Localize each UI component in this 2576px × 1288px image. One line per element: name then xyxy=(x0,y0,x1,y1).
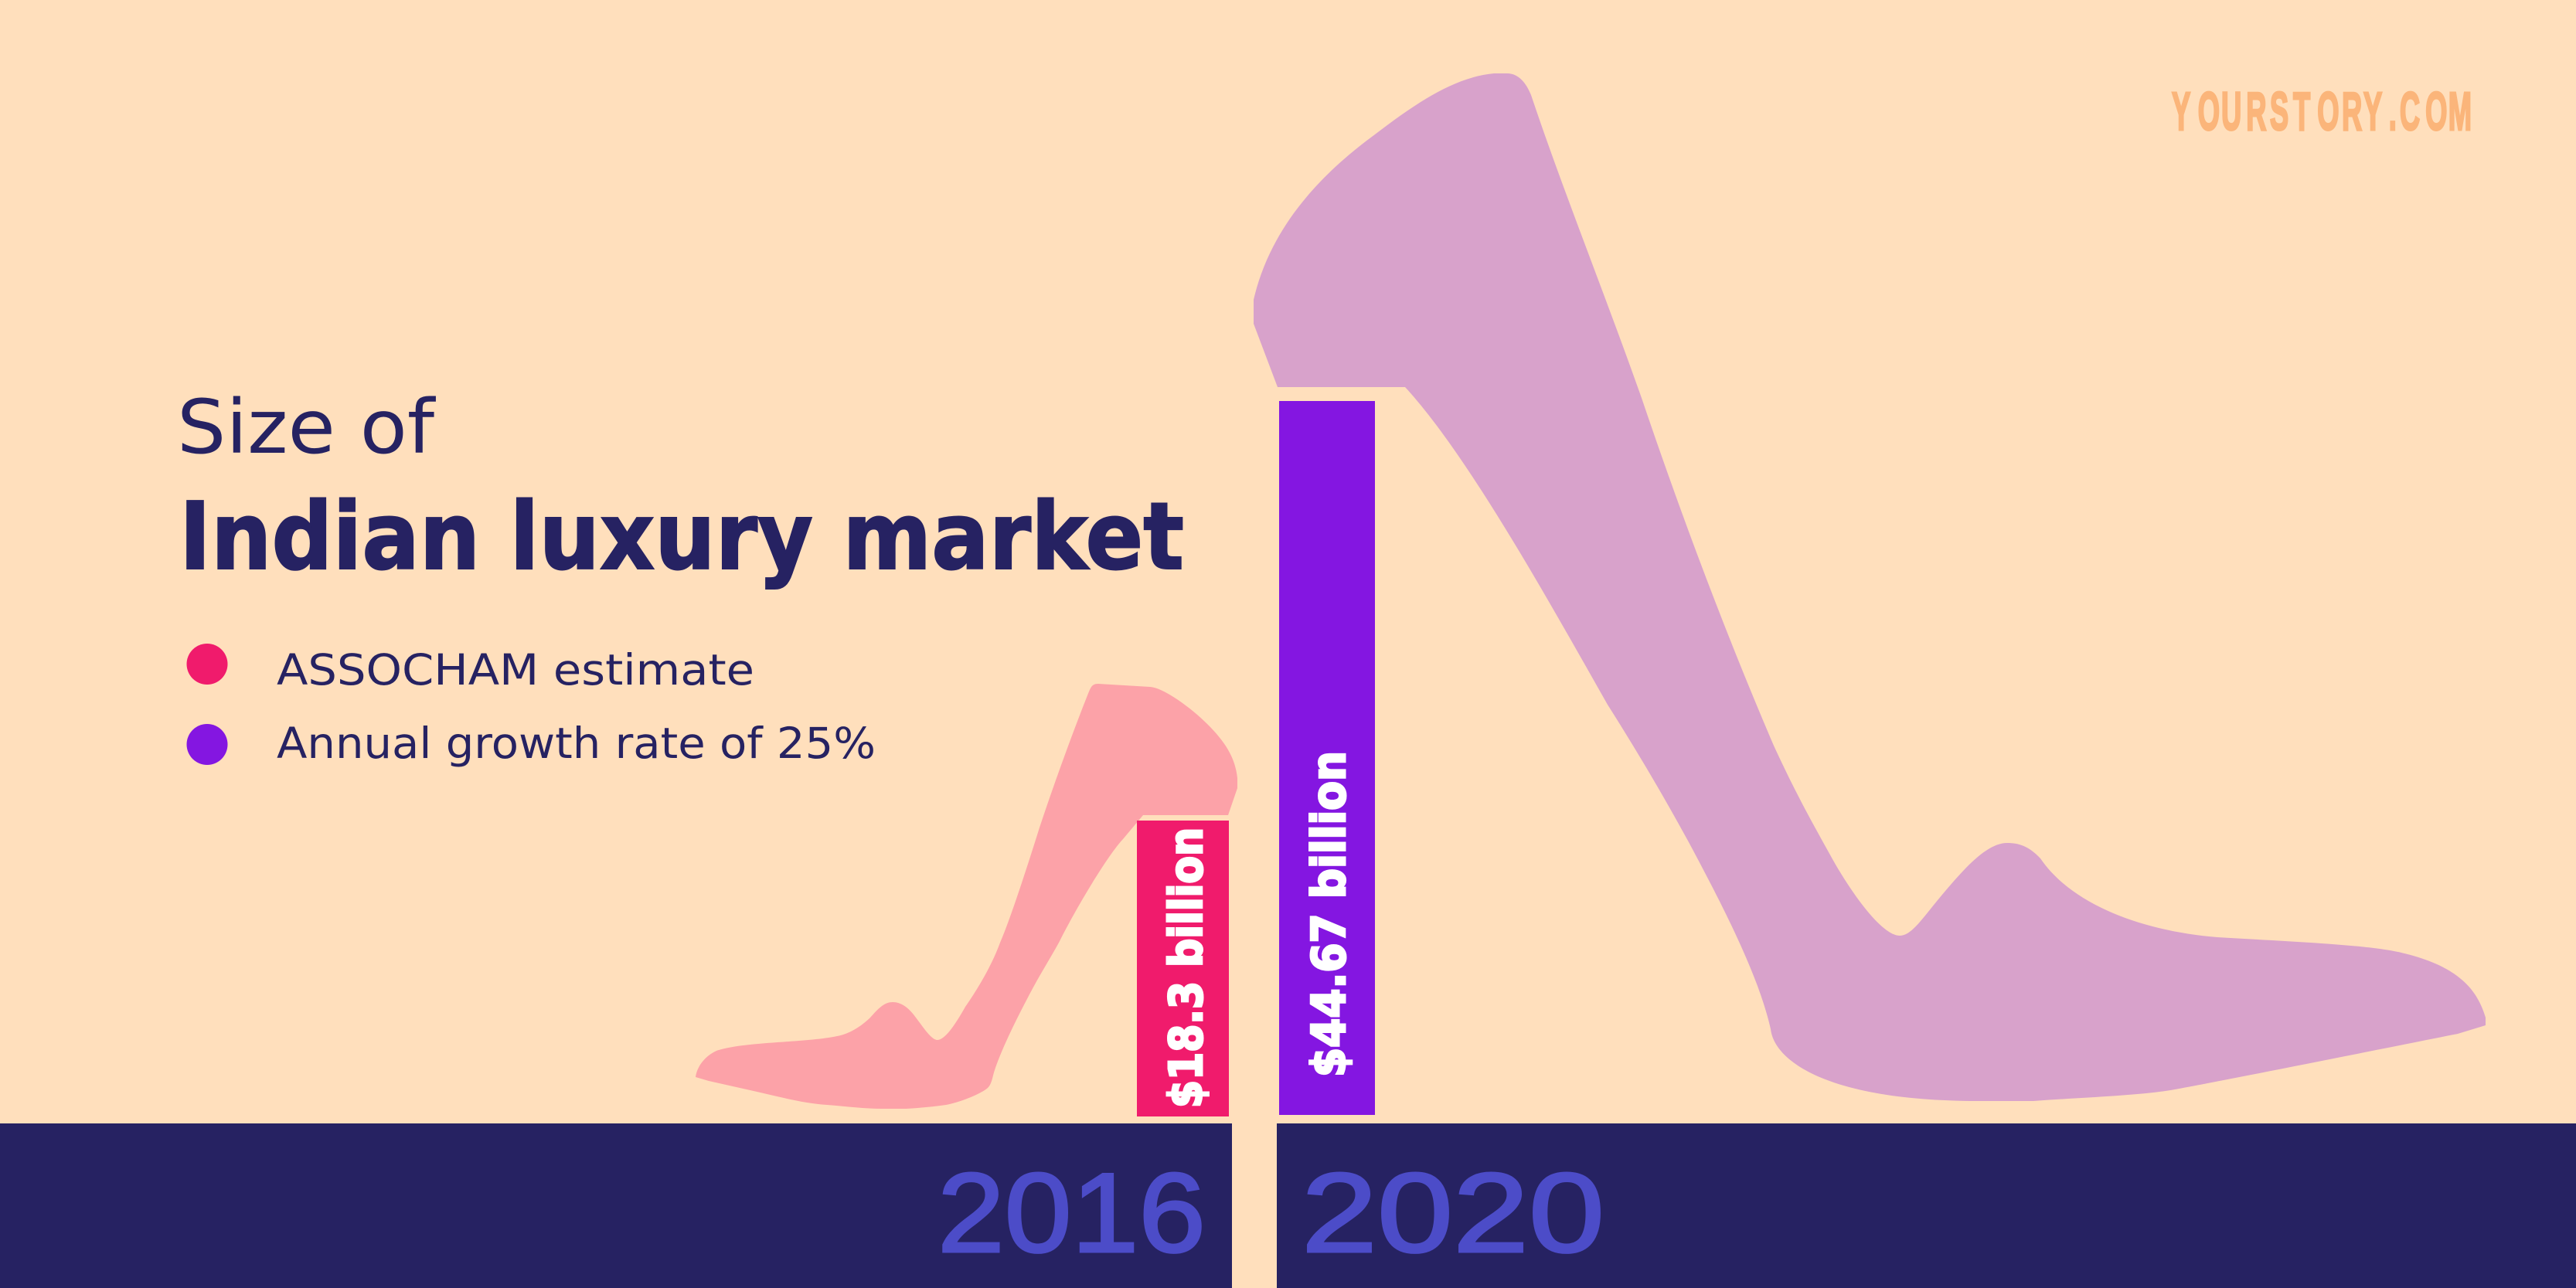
year label: 2016: 2016 xyxy=(938,1150,1206,1276)
title block xyxy=(177,384,1184,591)
bar: 2016 value xyxy=(1137,821,1229,1116)
legend xyxy=(187,644,876,768)
title line: size of: Size of xyxy=(177,384,436,471)
bar label: 18.3 billion: $18.3 billion xyxy=(1159,828,1213,1108)
small high heel shoe 2016 xyxy=(696,684,1237,1109)
baseline band: 2020 xyxy=(1277,1123,2576,1288)
legend item: annual growth rate: Annual growth rate of 25% xyxy=(277,719,876,768)
large high heel shoe 2020 xyxy=(1254,73,2486,1101)
bar: 2020 value xyxy=(1279,401,1375,1115)
title line: indian luxury market: Indian luxury market xyxy=(179,484,1184,591)
baseline band: 2016 xyxy=(0,1123,1232,1288)
year label: 2020: 2020 xyxy=(1302,1150,1604,1276)
watermark: yourstory.com: YOURSTORY.COM xyxy=(2172,81,2472,141)
bar label: 44.67 billion: $44.67 billion xyxy=(1302,751,1356,1077)
legend item: assocham estimate: ASSOCHAM estimate xyxy=(277,645,754,695)
